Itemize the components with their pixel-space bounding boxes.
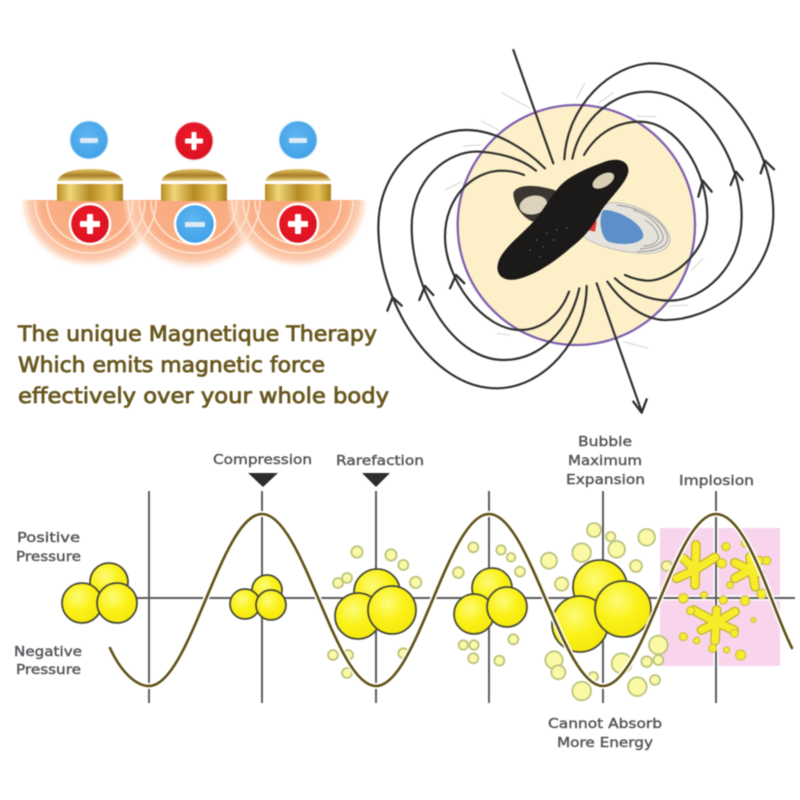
skin zones with concentric waves [0,125,400,272]
axes [137,491,795,703]
magnet 3 [265,169,331,201]
pressure wave [110,514,792,686]
labels: chart annotations: More Energy [557,735,653,751]
labels: chart annotations [14,434,754,751]
labels: chart annotations: Pressure [16,549,81,565]
icon: upper positive ion [175,122,213,160]
labels: chart annotations: Cannot Absorb [548,716,662,732]
bubble cluster: rarefaction [335,569,416,639]
labels: chart annotations: Expansion [566,472,645,488]
heading: therapy description: The unique Magnetique Therapy [17,322,377,346]
heading: therapy description: effectively over your whole body [18,384,389,408]
bubble cluster: second compression [454,568,527,634]
magnet 1 [57,169,123,201]
faint field ticks [445,83,703,348]
chart: magnetic field diagram [378,50,774,413]
magnetic sphere [458,105,695,345]
labels: chart annotations: Rarefaction [336,453,424,469]
icon: lower positive ion 2 [278,204,318,244]
icon: lower positive ion 1 [70,204,110,244]
arrowheads [387,161,774,413]
implosion splats [677,540,771,660]
icon: upper negative ion 1 [70,121,108,159]
labels: chart annotations: Compression [213,452,312,468]
icon: lower negative ion [175,204,215,244]
field lines [378,50,773,412]
insole product [497,160,670,280]
bubble cluster: initial [62,563,137,623]
small bubbles [328,523,672,700]
labels: chart annotations: Negative [14,644,82,660]
labels: chart annotations: Bubble [578,434,632,450]
panel: magnet therapy illustration [0,121,400,272]
marker: compression triangle [248,473,278,487]
magnet 2 [161,169,227,201]
icon: upper negative ion 2 [279,121,317,159]
labels: chart annotations: Positive [17,530,80,546]
chart: pressure wave and bubble cavitation [62,473,795,703]
heading: therapy description: Which emits magnetic force [18,353,325,377]
bubble cluster: maximum expansion [552,560,651,652]
marker: rarefaction triangle [362,473,390,487]
labels: chart annotations: Implosion [679,473,754,489]
labels: chart annotations: Pressure [16,662,81,678]
bubble cluster: compression [230,575,286,620]
implosion background [660,528,780,666]
labels: chart annotations: Maximum [568,453,642,469]
heading: therapy description [17,322,389,408]
